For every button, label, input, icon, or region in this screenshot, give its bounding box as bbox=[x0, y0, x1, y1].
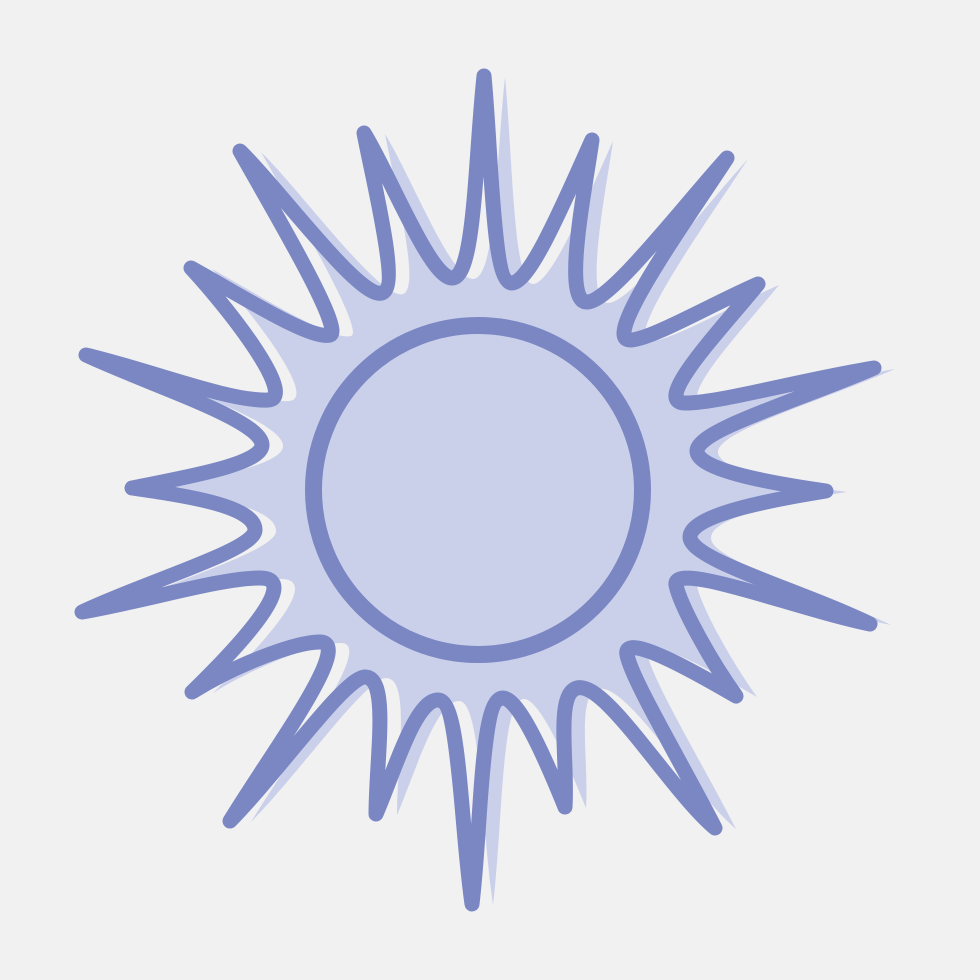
sun centre disc bbox=[314, 326, 642, 654]
sun ray outline bbox=[82, 76, 874, 904]
offset sun fill shadow bbox=[103, 77, 895, 905]
